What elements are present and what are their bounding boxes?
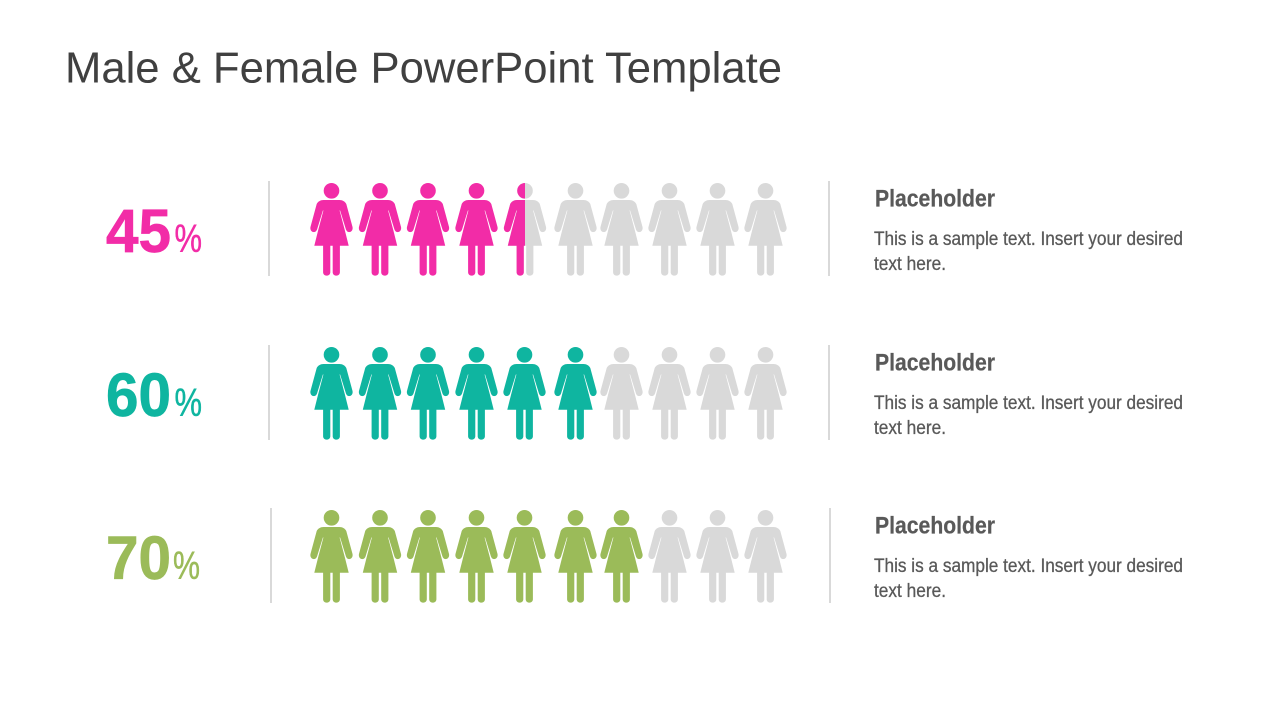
pictogram: 45 percent women bbox=[310, 183, 787, 276]
pictogram: 70 percent women bbox=[310, 510, 787, 603]
title: Male & Female PowerPoint Template bbox=[65, 44, 782, 92]
text block: placeholder 1: This is a sample text. Insert your desired bbox=[874, 228, 1183, 250]
row: 60 percent bbox=[106, 345, 1183, 440]
text block: placeholder 2: This is a sample text. Insert your desired bbox=[874, 392, 1183, 414]
text block: placeholder 1: Placeholder bbox=[875, 186, 995, 212]
percentage: 45%: 45 bbox=[106, 197, 171, 265]
text block: placeholder 3 bbox=[874, 512, 1183, 602]
text block: placeholder 3: This is a sample text. Insert your desired bbox=[874, 555, 1183, 577]
text block: placeholder 1 bbox=[874, 186, 1183, 275]
percentage: 60%: 60 bbox=[106, 361, 171, 429]
row: 45 percent bbox=[106, 181, 1183, 276]
percentage: 45%: % bbox=[174, 218, 202, 261]
text block: placeholder 2: text here. bbox=[874, 417, 946, 439]
pictogram: 60 percent women bbox=[310, 347, 787, 440]
text block: placeholder 3: text here. bbox=[874, 580, 946, 602]
text block: placeholder 3: Placeholder bbox=[875, 512, 995, 540]
row: 70 percent bbox=[106, 508, 1183, 603]
text block: placeholder 2 bbox=[874, 350, 1183, 439]
text block: placeholder 1: text here. bbox=[874, 253, 946, 275]
percentage: 70%: 70 bbox=[106, 524, 171, 592]
percentage: 60%: % bbox=[174, 382, 202, 425]
percentage: 70%: % bbox=[173, 545, 200, 588]
text block: placeholder 2: Placeholder bbox=[875, 350, 995, 376]
